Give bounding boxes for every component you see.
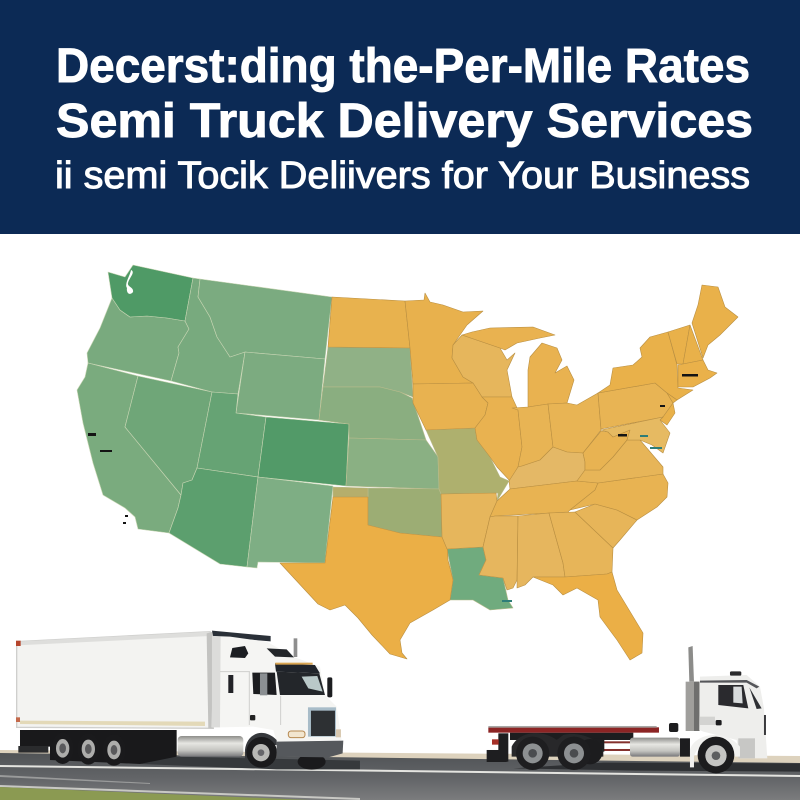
state: New Mexico	[247, 477, 333, 568]
front wheel and fender	[690, 735, 740, 773]
sleeper window	[230, 646, 248, 658]
side mirror	[327, 677, 332, 697]
state: Idaho	[171, 278, 245, 394]
central plains states	[319, 347, 513, 610]
Oklahoma panhandle	[333, 487, 368, 497]
state: Oregon	[87, 298, 189, 381]
flatbed chassis	[487, 726, 659, 762]
eastern orange states	[280, 285, 738, 660]
state: Virginia	[577, 440, 663, 483]
cab	[699, 671, 767, 758]
title line 2: Semi Truck Delivery Services	[56, 95, 753, 148]
road scene	[0, 750, 800, 800]
cab step	[738, 738, 755, 758]
state: Louisiana	[447, 547, 513, 610]
state: Upper Michigan	[462, 327, 555, 350]
fender and front wheel	[245, 733, 326, 770]
state: West Virginia	[583, 430, 630, 470]
state: New Jersey	[660, 393, 677, 425]
grass strip	[0, 787, 310, 800]
state: Colorado	[258, 417, 349, 486]
fuel tank	[630, 738, 680, 757]
state: Florida	[533, 572, 643, 660]
subtitle: ii semi Tocik Deliivers for Your Business	[55, 155, 750, 197]
state: Lower Michigan	[528, 343, 574, 407]
state: Tennessee	[490, 481, 598, 517]
left semi truck	[16, 631, 360, 770]
door window	[252, 673, 277, 695]
state: Massachusetts and Connecticut	[678, 360, 717, 387]
state: Ohio	[548, 393, 601, 453]
state: Oklahoma	[368, 488, 442, 537]
fender arches	[512, 733, 603, 757]
state: Wisconsin	[452, 335, 515, 397]
state: New Hampshire	[683, 325, 703, 364]
state: Washington	[108, 265, 193, 321]
state: Vermont	[668, 325, 690, 364]
state: Alabama	[517, 513, 565, 588]
truck shadow	[140, 757, 360, 769]
state: North Carolina	[570, 474, 668, 520]
state: Georgia	[549, 512, 613, 577]
state: Illinois	[475, 397, 522, 481]
state: Montana	[198, 279, 332, 359]
western green states	[77, 265, 349, 568]
state: Utah	[197, 392, 266, 477]
truck shadow	[513, 763, 800, 772]
state: Missouri	[426, 428, 509, 501]
state: Maryland and Delaware	[601, 417, 670, 453]
state: Arizona	[169, 468, 258, 567]
state: Wyoming	[236, 352, 325, 420]
door panel lines	[220, 672, 281, 725]
exhaust stack	[686, 646, 700, 731]
exhaust stack	[294, 638, 297, 657]
front bumper	[277, 741, 343, 757]
state: Minnesota	[405, 293, 483, 384]
cargo box	[16, 632, 213, 728]
state: Pennsylvania	[598, 383, 673, 429]
Puget Sound	[126, 270, 133, 294]
state: South Dakota	[323, 347, 413, 397]
state: California	[77, 363, 181, 533]
headlights	[288, 731, 305, 738]
coastal specks	[88, 374, 698, 602]
rear wheels	[52, 733, 126, 766]
state: South Carolina	[575, 504, 637, 548]
state: Texas	[280, 497, 453, 659]
title line 1: Decerst:ding the-Per-Mile Rates	[56, 40, 750, 93]
state: North Dakota	[328, 297, 410, 348]
state: Nevada	[125, 376, 212, 495]
fuel tank	[178, 736, 243, 757]
state: Iowa	[413, 383, 488, 430]
state: Indiana	[512, 404, 553, 467]
mirror	[669, 723, 678, 732]
state: Kentucky	[509, 447, 585, 489]
rear wheels	[516, 737, 603, 770]
state: New York	[598, 332, 693, 400]
state: Kansas	[346, 438, 439, 489]
windshield	[277, 672, 325, 695]
cab window	[718, 685, 748, 708]
state: Arkansas	[441, 493, 497, 549]
right flatbed truck	[487, 646, 800, 773]
state: Maine	[692, 285, 738, 358]
visor with amber lights	[275, 663, 320, 673]
grille	[308, 707, 336, 737]
chassis	[20, 730, 177, 764]
tractor cab	[212, 631, 342, 742]
state: Mississippi	[479, 516, 518, 590]
header banner	[0, 0, 800, 234]
state: Nebraska	[319, 387, 426, 440]
US map	[77, 265, 738, 660]
